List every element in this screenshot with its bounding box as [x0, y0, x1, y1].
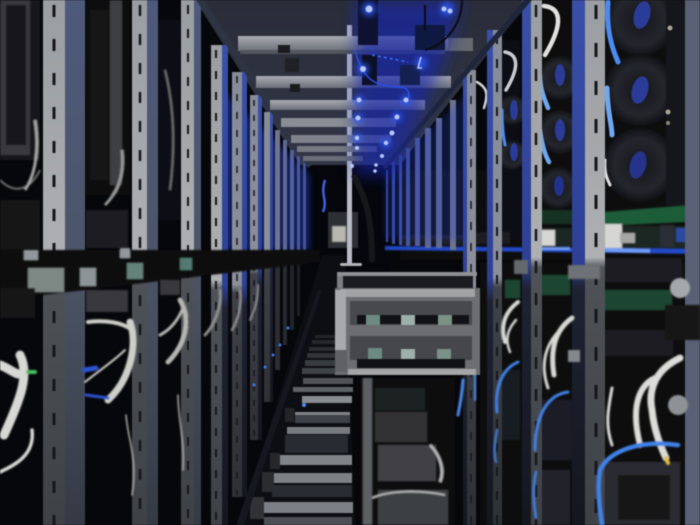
- mid fans: [497, 56, 582, 209]
- ceiling: [195, 0, 530, 165]
- cable: near left bundle: [0, 355, 32, 472]
- cable: middle right bundle: [503, 302, 572, 388]
- right rack blue back glow: [385, 95, 465, 240]
- drive row one: [350, 301, 472, 325]
- left cable bundles: [0, 285, 258, 495]
- right equipment background: [400, 0, 700, 260]
- drive row two: [350, 336, 472, 368]
- walkway floor: [236, 255, 355, 525]
- pulled-out server chassis: [335, 263, 480, 375]
- large fans, far right: [603, 0, 686, 205]
- diagonal top rail of right rack: [383, 0, 532, 170]
- cable: fourth bundle: [205, 285, 258, 335]
- lower centre server units: [360, 378, 455, 525]
- post slots: [471, 5, 596, 525]
- server unit 3: [378, 445, 436, 481]
- suspended pipe: [347, 25, 352, 265]
- floor side brackets: [250, 497, 264, 519]
- right lower cables: [458, 302, 680, 525]
- left rack uprights: [43, 0, 306, 525]
- server unit 1: [375, 388, 425, 410]
- cable: third bundle: [126, 300, 186, 495]
- post slots: [54, 5, 254, 525]
- right blue and white coolant hoses: [477, 2, 618, 185]
- right rack lower equipment: [480, 258, 700, 525]
- hanging cables at aisle end: [354, 175, 372, 262]
- left side blue LEDs: [252, 307, 330, 386]
- server unit 2: [375, 412, 427, 442]
- server unit 4: [378, 490, 448, 525]
- chassis top tray: [337, 263, 477, 290]
- left equipment rack background: [0, 0, 180, 250]
- right mid shelf connectors: [514, 260, 700, 415]
- left rack mid shelf band: [0, 248, 320, 318]
- green circuit boards and blue strip: [385, 205, 700, 254]
- far end of aisle: [305, 165, 390, 295]
- fan middle: [604, 54, 676, 126]
- right rack uprights: [386, 0, 700, 525]
- fan bottom: [603, 128, 677, 202]
- diagonal top rail of left rack: [196, 0, 312, 168]
- grey ceiling rails: [238, 36, 473, 161]
- fan top: [604, 0, 676, 56]
- left rack blue back glow: [222, 90, 310, 250]
- cable: blue hose near right: [599, 444, 678, 525]
- cable: second bundle: [85, 321, 133, 400]
- blue LED cluster and cabling: [350, 0, 462, 175]
- cable: near right bundle: [608, 358, 680, 458]
- chassis body: [335, 288, 480, 375]
